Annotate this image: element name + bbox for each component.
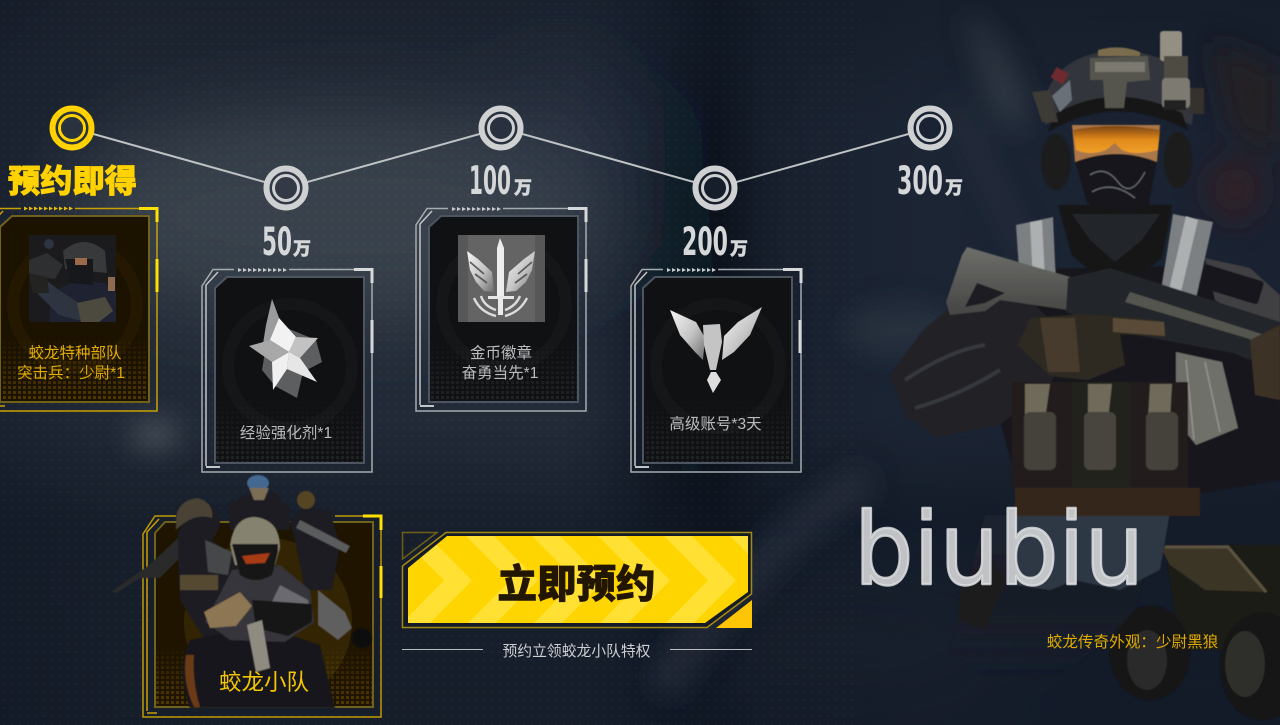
node: 300万 bbox=[910, 108, 950, 148]
text: reward name bbox=[462, 344, 538, 382]
gun: left soldier bbox=[112, 536, 190, 594]
mask bbox=[1075, 153, 1157, 211]
right soldier bbox=[290, 505, 340, 590]
centre helmet bbox=[230, 517, 280, 565]
label: 200万: 万 bbox=[730, 235, 748, 261]
label: 300万: 万 bbox=[945, 174, 963, 200]
night vision device bbox=[1160, 31, 1190, 110]
watermark: biubiu bbox=[854, 491, 1144, 608]
illustration: squad soldiers bbox=[112, 475, 372, 708]
card: 100万 reward bbox=[416, 207, 586, 411]
rifle bbox=[946, 247, 1280, 445]
ear cups bbox=[1041, 134, 1071, 190]
text: reward name: 经验强化剂*1 bbox=[240, 424, 332, 442]
card: squad bbox=[112, 475, 381, 717]
label: 50万: 万 bbox=[293, 235, 311, 261]
caption: legendary skin: 蛟龙传奇外观：少尉黑狼 bbox=[1047, 633, 1219, 651]
arm left bbox=[890, 300, 1070, 437]
drone bbox=[318, 590, 352, 640]
caption: reserve privilege: 预约立领蛟龙小队特权 bbox=[503, 642, 651, 660]
goggles bbox=[1073, 126, 1160, 153]
node: 50万 bbox=[266, 168, 306, 208]
text: reward name: 高级账号*3天 bbox=[669, 415, 762, 433]
centre rifle bbox=[247, 620, 270, 672]
text: reward name: 蛟龙特种部队 bbox=[28, 344, 122, 362]
face bbox=[1072, 125, 1160, 162]
character: main soldier bbox=[890, 31, 1280, 720]
text: squad name: 蛟龙小队 bbox=[219, 670, 309, 695]
label: 50万: 50 bbox=[262, 220, 292, 265]
corner: bottom right bbox=[716, 600, 752, 628]
text: reward name: 突击兵：少尉*1 bbox=[17, 364, 125, 382]
scarf bbox=[1058, 205, 1172, 292]
portrait: assault soldier bbox=[29, 235, 116, 322]
vest straps bbox=[1016, 217, 1056, 285]
icon: silver wings bbox=[670, 307, 762, 393]
icon: sword badge bbox=[458, 235, 545, 322]
top soldier bbox=[228, 492, 290, 530]
node: reserve bbox=[52, 108, 92, 148]
label: 100万: 100 bbox=[469, 159, 511, 204]
node: 100万 bbox=[482, 108, 520, 148]
icon: silver star bbox=[249, 299, 322, 398]
ammo pouches bbox=[1012, 382, 1188, 488]
card: reserve reward bbox=[0, 206, 157, 411]
progress line bbox=[72, 128, 930, 188]
text: reward name: 奋勇当先*1 bbox=[462, 364, 538, 382]
corner: top left bbox=[402, 532, 437, 559]
label: 300万: 300 bbox=[897, 159, 943, 204]
left soldier bbox=[178, 503, 238, 640]
heading: reserve reward: 预约即得 bbox=[8, 156, 137, 202]
card: 50万 reward bbox=[202, 268, 372, 472]
button label: 立即预约 bbox=[498, 553, 656, 610]
text: reward name: 金币徽章 bbox=[470, 344, 532, 362]
legs bbox=[950, 515, 1160, 680]
belt bbox=[1015, 488, 1200, 516]
label: 200万: 200 bbox=[682, 220, 728, 265]
helmet bbox=[1044, 50, 1193, 125]
card: 200万 reward bbox=[631, 268, 801, 472]
label: 100万: 万 bbox=[514, 174, 532, 200]
glove bbox=[1018, 314, 1165, 380]
vehicle drone bbox=[1110, 545, 1280, 720]
centre soldier cape bbox=[182, 625, 335, 708]
centre soldier bbox=[205, 565, 314, 642]
button: reserve now bbox=[402, 532, 752, 628]
shoulder right bbox=[1205, 258, 1280, 340]
node: 200万 bbox=[696, 168, 734, 208]
text: reward name bbox=[17, 344, 125, 382]
torso bbox=[1000, 265, 1280, 495]
